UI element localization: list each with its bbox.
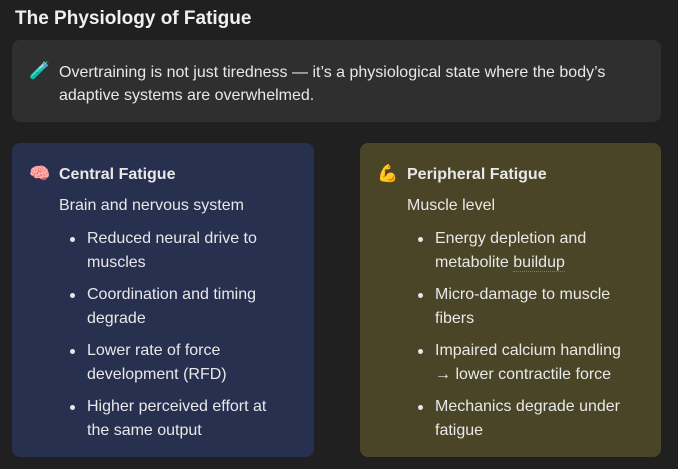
list: peripheral: Impaired calcium handling [435,342,621,359]
callout text: Overtraining is not just tiredness — it’s a physiological state where the body’s [59,64,605,81]
panel: central fatigue [12,143,314,457]
callout [12,40,661,122]
list: central: Reduced neural drive to [87,230,257,247]
list: central: muscles [87,254,146,271]
list: central: development (RFD) [87,366,227,383]
icon: test tube: 🧪 [29,61,50,80]
heading: central fatigue: Central Fatigue [59,166,175,183]
list: central [70,230,266,439]
list: central: Lower rate of force [87,342,220,359]
list: central: Higher perceived effort at [87,398,266,415]
list: central: Coordination and timing [87,286,256,303]
callout text [59,64,605,104]
subtitle: Brain and nervous system [59,197,244,214]
subtitle: Muscle level [407,197,495,214]
heading: central fatigue: 🧠 [29,164,50,183]
list: peripheral [418,230,621,439]
title: The Physiology of Fatigue [15,8,251,29]
list: peripheral: Energy depletion and [435,230,586,247]
list: peripheral: metabolite buildup [435,254,565,271]
list: central: degrade [87,310,146,327]
list: peripheral: → lower contractile force [435,366,611,383]
list: central: the same output [87,422,202,439]
list: peripheral: Micro-damage to muscle [435,286,610,303]
callout text: adaptive systems are overwhelmed. [59,87,314,104]
list: peripheral: fibers [435,310,474,327]
heading: peripheral fatigue: Peripheral Fatigue [407,166,547,183]
list: peripheral: Mechanics degrade under [435,398,620,415]
list: peripheral: fatigue [435,422,483,439]
panel: peripheral fatigue [360,143,661,457]
heading: peripheral fatigue: 💪 [377,164,398,183]
